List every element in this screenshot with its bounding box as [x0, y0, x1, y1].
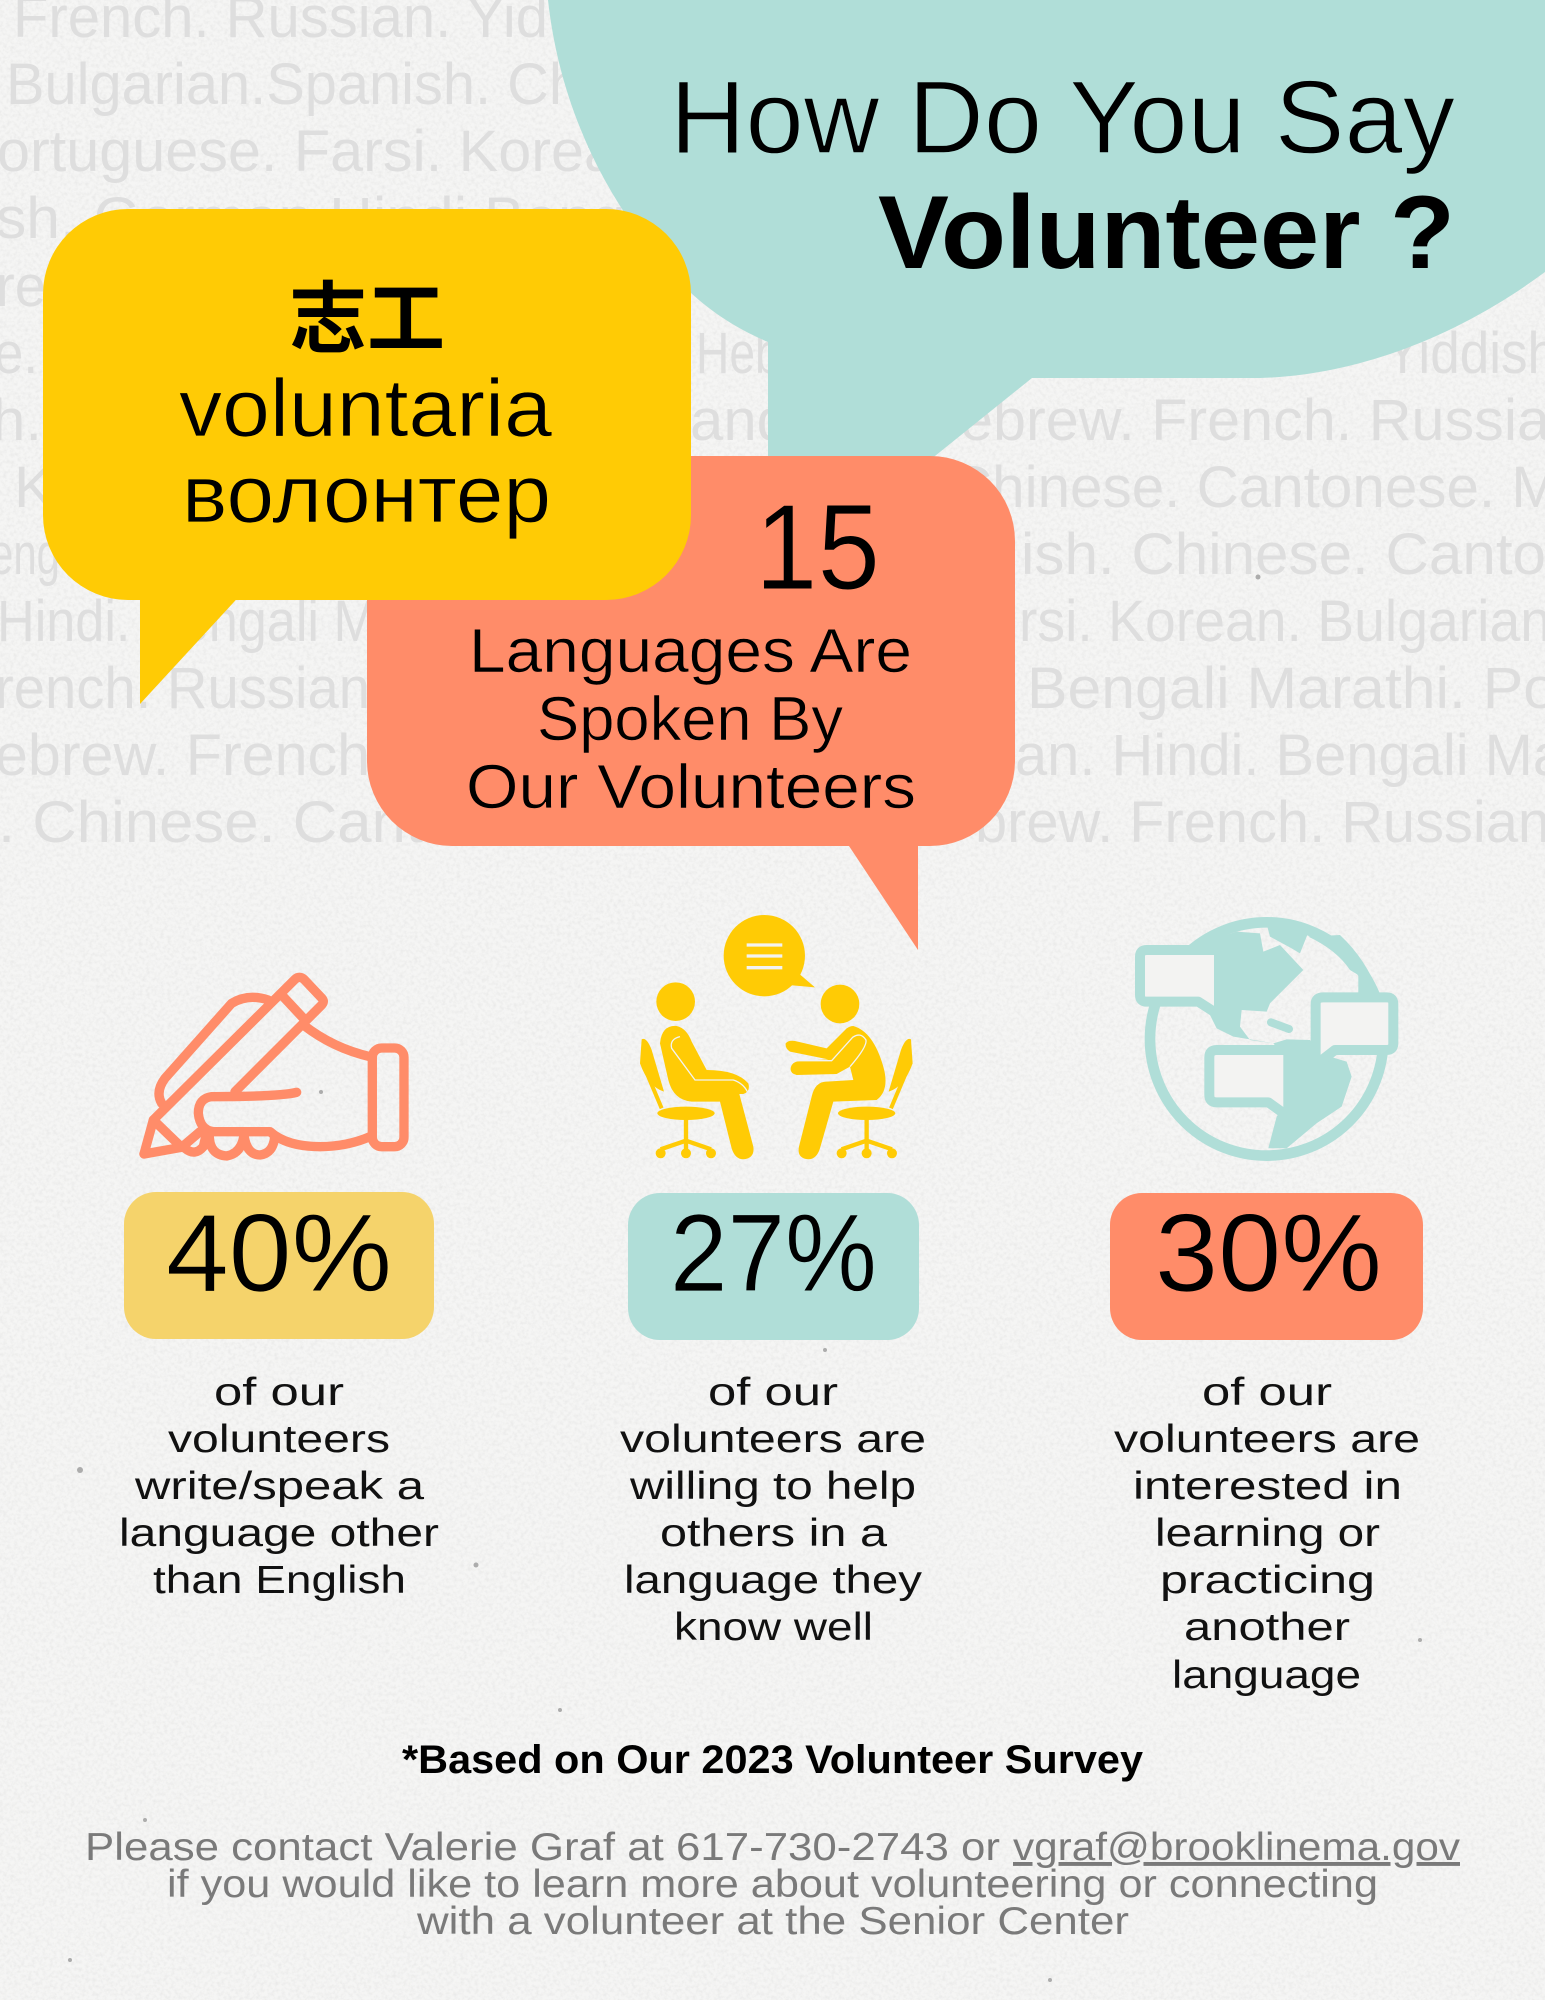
icon: hand writing with pen: [144, 977, 404, 1156]
orange speech bubble: [367, 456, 1015, 950]
stat text: 27 percent: others in a: [660, 1512, 887, 1555]
contact information: vgraf@brooklinema.gov: [1013, 1826, 1461, 1869]
icon: two people talking in chairs: [640, 915, 913, 1159]
title: [670, 60, 1455, 291]
yellow bubble translations: [179, 257, 552, 540]
stat text: 40 percent: volunteers: [168, 1418, 390, 1461]
background language word pattern: ebrew. French. Russia: [960, 388, 1545, 453]
stat text: 30 percent: language: [1172, 1654, 1361, 1697]
background language word pattern: Chinese. Cantonese. M: [950, 455, 1545, 520]
stat text: 40 percent: language other: [119, 1512, 439, 1555]
background language word pattern: sh. German Hindi Bengali: [0, 186, 686, 251]
background language word pattern: Hebr: [696, 321, 796, 386]
stat text: 30 percent: learning or: [1155, 1512, 1380, 1555]
right chair: [837, 1039, 913, 1158]
background language word pattern: ish. Chinese. Canto: [1021, 522, 1545, 587]
background language word pattern: brew. French. Russian: [975, 790, 1545, 855]
yellow bubble translations: voluntaria: [179, 363, 552, 454]
contact information: Please contact Valerie Graf at 617-730-2743 or: [85, 1826, 1000, 1869]
survey footnote: *Based on Our 2023 Volunteer Survey: [402, 1738, 1144, 1782]
orange bubble text: Spoken By: [537, 685, 843, 754]
stat text: 27 percent: volunteers are: [620, 1418, 926, 1461]
background language word pattern: Bengali Marathi. Po: [1027, 656, 1545, 721]
stat text: 30 percent: interested in: [1133, 1465, 1402, 1508]
stat box: 27%: [628, 1192, 919, 1340]
stat text: 40 percent: [119, 1371, 439, 1602]
orange bubble text: Our Volunteers: [466, 753, 916, 822]
stat text: 27 percent: [620, 1371, 926, 1649]
background language word pattern: Bulgarian.Spanish. Ch: [6, 52, 581, 117]
left person: [656, 982, 754, 1159]
stat text: 27 percent: willing to help: [629, 1465, 916, 1508]
yellow speech bubble: [43, 209, 691, 704]
stat text: 40 percent: of our: [214, 1371, 344, 1414]
background language word pattern: and: [690, 388, 790, 453]
contact information: [85, 1826, 1461, 1943]
right person: [786, 985, 886, 1159]
yellow bubble translations: 志工: [289, 257, 445, 369]
stat box: 27%: 27%: [670, 1192, 877, 1315]
left chair: [640, 1039, 716, 1158]
title: How Do You Say: [670, 60, 1455, 176]
stat text: 27 percent: know well: [674, 1606, 873, 1649]
yellow bubble translations: волонтер: [182, 449, 551, 540]
background language word pattern: Hindi. Bengali M: [0, 589, 377, 654]
teal title speech bubble: [548, 0, 1545, 480]
contact information: with a volunteer at the Senior Center: [416, 1900, 1129, 1943]
stat text: 30 percent: volunteers are: [1114, 1418, 1420, 1461]
stat text: 40 percent: than English: [153, 1559, 406, 1602]
icon: globe with speech bubbles: [1140, 922, 1393, 1156]
stat text: 30 percent: another: [1184, 1606, 1350, 1649]
stat text: 30 percent: of our: [1202, 1371, 1332, 1414]
big number 15: 15: [755, 479, 880, 615]
stat text: 40 percent: write/speak a: [134, 1465, 424, 1508]
background language word pattern: [0, 0, 1545, 855]
orange bubble text: [466, 617, 916, 822]
background language word pattern: K: [14, 455, 54, 520]
stat box: 40%: 40%: [166, 1192, 392, 1315]
contact information: if you would like to learn more about volunteering or connecting: [167, 1863, 1378, 1906]
speech balloon: [724, 915, 815, 996]
background language word pattern: ortuguese. Farsi. Korea: [0, 119, 618, 184]
stat text: 27 percent: of our: [708, 1371, 838, 1414]
stat box: 30%: [1110, 1192, 1423, 1340]
stat text: 30 percent: practicing: [1160, 1559, 1375, 1602]
background language word pattern: . Chinese. Cant: [0, 790, 423, 855]
background language word pattern: ebrew. French: [0, 723, 370, 788]
title: Volunteer ?: [878, 175, 1455, 291]
stat box: 30%: 30%: [1155, 1192, 1382, 1315]
stat text: 30 percent: [1114, 1371, 1420, 1697]
stat text: 27 percent: language they: [624, 1559, 923, 1602]
background language word pattern: rench. Russian: [0, 656, 370, 721]
orange bubble text: Languages Are: [469, 617, 912, 686]
stat box: 40%: [124, 1192, 434, 1339]
